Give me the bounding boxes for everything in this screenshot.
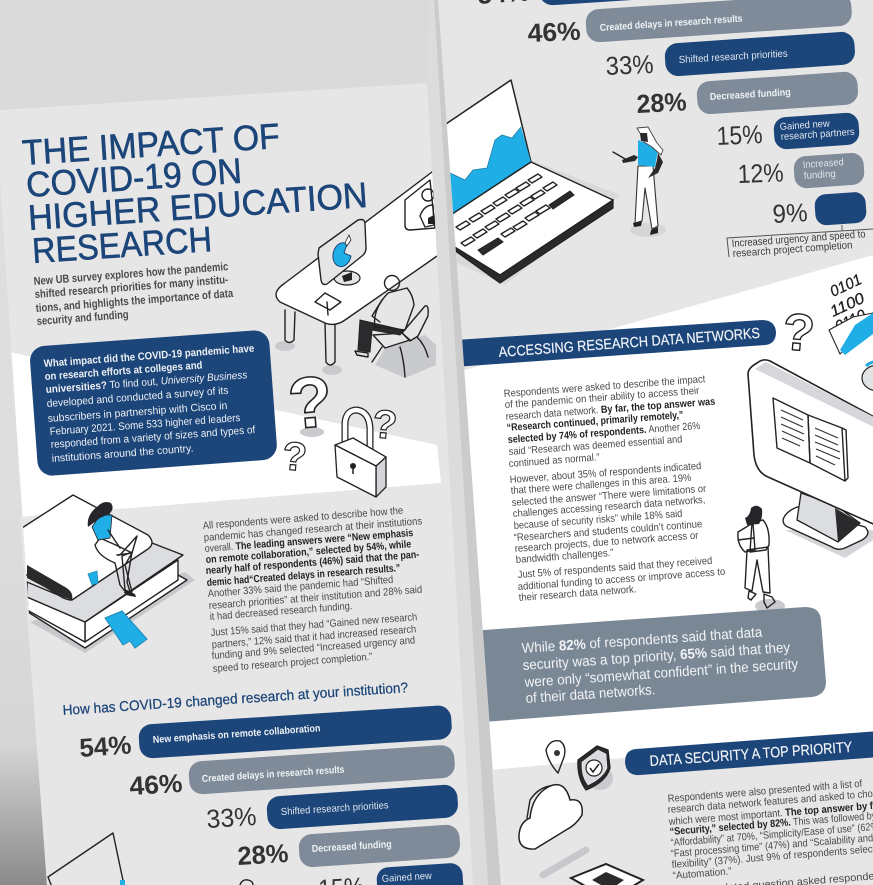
bar chart: left page: 33% [206, 801, 257, 834]
body text: data security [667, 779, 873, 885]
subtitle [33, 261, 234, 328]
callout: data security: were only “somewhat confident” in the security [523, 656, 799, 691]
body text: accessing networks: “Researchers and students couldn’t continue [513, 519, 703, 544]
bar chart: left page: 54% [78, 729, 132, 763]
bar chart: left page: Decreased funding [312, 839, 392, 855]
subtitle: shifted research priorities for many institu- [34, 274, 229, 301]
reader [95, 538, 132, 595]
body text: first section: overall. The leading answers were “New emphasis [204, 528, 414, 555]
callout: data security: of their data networks. [525, 682, 656, 707]
bar chart: right page: 9% [772, 197, 808, 229]
illustration: monitor with book [748, 360, 873, 558]
body text: accessing networks: Respondents were asked to describe the impact [503, 374, 706, 400]
icon: question marks: ? [285, 361, 336, 445]
intro callout: institutions around the country. [51, 443, 194, 465]
body text: first section [202, 506, 423, 675]
bar chart: right page: Created delays in research results [599, 14, 743, 34]
intro callout: universities? To find out, University Business [45, 369, 248, 396]
callout: data security: While 82% of respondents said that data [521, 625, 763, 657]
illustration: desk with person [275, 169, 440, 378]
bar chart: left page: New emphasis on remote collaboration [152, 723, 321, 746]
section heading: accessing research data networks [440, 320, 776, 368]
subtitle: New UB survey explores how the pandemic [33, 261, 229, 288]
body text: first section: speed to research project completion.” [212, 652, 373, 675]
body text: first section: All respondents were asked to describe how the [202, 506, 404, 532]
bar chart: left page: Gained new [381, 871, 433, 885]
subtitle: security and funding [36, 309, 129, 328]
bar chart: right page: 12% [737, 157, 784, 189]
body text: accessing networks: “Research continued, primarily remotely,” [506, 410, 684, 434]
bar chart: right page: 28% [636, 86, 687, 119]
bar chart: right page: funding [803, 169, 836, 182]
bar chart: right page: Increased [802, 157, 844, 171]
body text: accessing networks: research projects, due to network access or [514, 531, 699, 555]
bar chart: right page: 15% [716, 119, 763, 151]
icons: pin, shield, cloud, device [519, 741, 643, 885]
intro callout [29, 329, 278, 477]
body text: first section: pandemic has changed research at their institutions [203, 516, 423, 544]
body text: accessing networks: additional funding to access or improve access to [517, 567, 726, 593]
chair and person [402, 306, 428, 341]
body text: first section: it had decreased research funding. [209, 601, 353, 623]
bar chart: left page: Shifted research priorities [280, 800, 389, 818]
body text: first section: Just 15% said that they had “Gained new research [210, 612, 418, 639]
bar chart: right page: research partners [780, 127, 855, 143]
body text: data security: “Automation.” [672, 866, 733, 882]
bar chart: left page: 46% [129, 768, 183, 801]
intro callout: What impact did the COVID-19 pandemic have [43, 343, 255, 370]
bar chart: left page [48, 705, 464, 885]
body text: first section: on remote collaboration,” selected by 54%, while [205, 539, 412, 566]
intro callout: responded from a variety of sizes and types of [50, 424, 256, 451]
illustration: student with backpack [738, 506, 785, 613]
body text: accessing networks: selected the answer “There were limitations or [511, 484, 707, 509]
body text: accessing networks: research data network. By far, the top answer was [505, 397, 716, 423]
callout: data security: security was a top priority, 65% said that they [522, 640, 791, 674]
bar chart: right page [476, 0, 873, 260]
icon: question marks [281, 361, 399, 480]
left page [0, 83, 473, 885]
illustration: binary and folder [828, 271, 873, 355]
body text: accessing networks: continued as normal.” [508, 452, 600, 470]
icon: question marks: ? [371, 402, 399, 448]
intro callout: February 2021. Some 533 higher ed leaders [49, 412, 241, 438]
illustration: binary and folder: 0101 [828, 271, 865, 301]
body text: accessing networks: selected by 74% of respondents. Another 26% [507, 421, 701, 446]
body text: accessing networks: bandwidth challenges.” [515, 548, 614, 566]
body text: first section: Another 33% said the pandemic had “Shifted [207, 575, 394, 600]
icon: padlock [335, 410, 386, 497]
body text: accessing networks: of the pandemic on their ability to access their [504, 386, 700, 411]
icon: question mark right: ? [780, 303, 817, 363]
bar chart: right page: 46% [527, 16, 581, 48]
body text: first section: nearly half of respondents (46%) said that the pan- [205, 550, 420, 577]
illustration: binary and folder: 1100 [828, 290, 868, 321]
body text: accessing networks: their research data network. [518, 584, 637, 604]
lower grey panel [492, 735, 873, 885]
body text: first section: funding and 9% selected “Increased urgency and [211, 635, 416, 662]
body text: accessing networks: However, about 35% of respondents indicated [509, 461, 702, 486]
title [21, 116, 369, 271]
bar chart: right page: Decreased funding [710, 87, 791, 103]
bar chart: right page: research project completion [732, 239, 853, 260]
body text: accessing networks: challenges accessing research data networks, [512, 495, 706, 520]
bar chart: left page: 28% [237, 838, 289, 871]
body text: accessing networks: because of security risks” while 18% said [513, 509, 683, 532]
title: COVID-19 ON [25, 151, 243, 205]
bar chart: left page: Created delays in research results [201, 765, 345, 785]
title: HIGHER EDUCATION [27, 175, 369, 238]
body text: accessing networks: said “Research was deemed essential and [508, 434, 683, 458]
illustration: laptop with chart [440, 80, 620, 285]
intro callout: subscribers in partnership with Cisco in [47, 400, 228, 425]
body text: accessing networks: Just 5% of respondents said that they received [517, 556, 713, 581]
right page [438, 0, 873, 885]
illustration: standing woman [613, 127, 666, 237]
bar chart: right page: Shifted research priorities [679, 49, 788, 66]
body text: accessing networks [503, 374, 726, 604]
body text: accessing networks: that there were challenges in this area. 19% [510, 473, 692, 497]
illustration: binary and folder: 0110 [833, 307, 869, 336]
illustration: book with reader [22, 495, 195, 653]
subtitle: tions, and highlights the importance of data [35, 288, 234, 315]
chart heading: How has COVID-19 changed research at your institution? [62, 680, 409, 719]
grey lower panel [20, 483, 473, 885]
intro callout: developed and conducted a survey of its [46, 385, 229, 410]
body text: first section: partners,” 12% said that it had increased research [211, 624, 417, 651]
title: RESEARCH [31, 219, 213, 271]
title: THE IMPACT OF [21, 116, 281, 173]
intro callout: on research efforts at colleges and [44, 359, 203, 383]
icon: round device [862, 361, 873, 391]
bar chart: right page: 33% [605, 49, 654, 81]
callout: data security [470, 607, 826, 723]
bar chart: right page: Gained new [779, 118, 831, 133]
section heading: data security [625, 731, 873, 775]
body text: first section: demic had“Created delays in research results.” [206, 563, 401, 589]
body text: first section: research priorities” at their institution and 28% said [208, 585, 423, 612]
icon: question marks: ? [281, 434, 309, 480]
section heading: accessing research data networks: ACCESSING RESEARCH DATA NETWORKS [498, 326, 761, 361]
